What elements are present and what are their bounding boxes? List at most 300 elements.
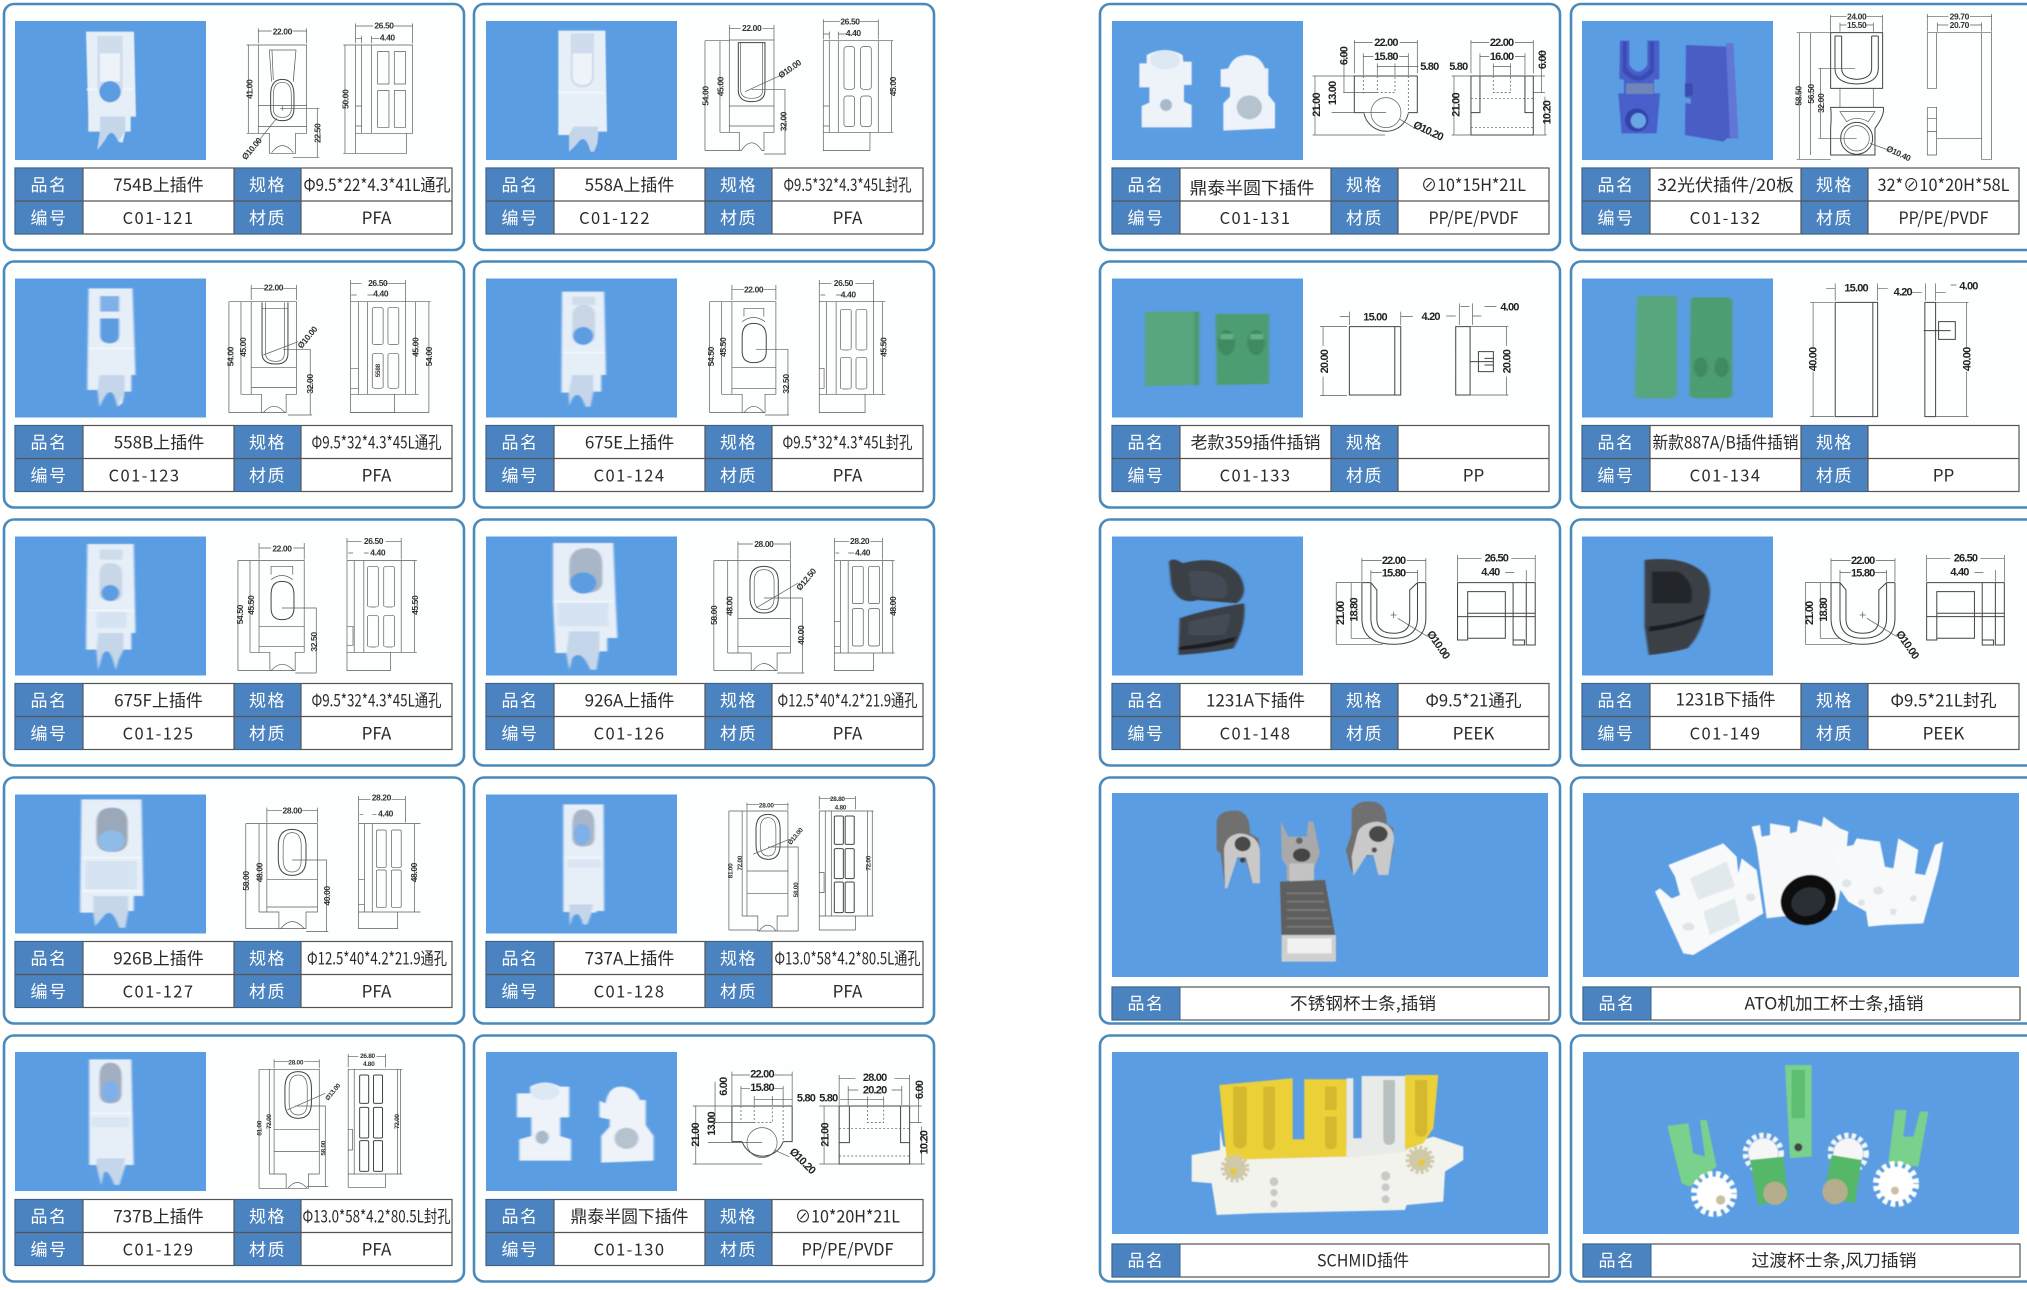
technical drawing: 558B: 45.00 bbox=[238, 337, 248, 357]
spec table: C01-132: C01-132 bbox=[1690, 205, 1761, 229]
panel: 32光伏插件/20板 C01-132 bbox=[1571, 4, 2027, 250]
technical drawing: 737A: 72.00 bbox=[865, 855, 872, 871]
technical drawing: 926B: 28.20 bbox=[372, 792, 392, 802]
spec table: C01-134: 规格 bbox=[1816, 428, 1853, 454]
product photo: 鼎泰 C01-130 bbox=[486, 1052, 677, 1191]
technical drawing: C01-134: 15.00 bbox=[1844, 283, 1869, 295]
technical drawing: C01-132: 32.00 bbox=[1816, 93, 1826, 113]
technical drawing: C01-130: 20.20 bbox=[863, 1084, 887, 1096]
panel: 1231B lower plug-in C01-149 bbox=[1571, 520, 2027, 766]
technical drawing: C01-131: 15.80 bbox=[1374, 51, 1398, 63]
spec table: SCHMID: SCHMID插件 bbox=[1317, 1246, 1409, 1272]
technical drawing: C01-134 bbox=[1808, 280, 1978, 417]
product photo: green transition parts bbox=[1583, 1052, 2019, 1234]
card frame bbox=[4, 778, 464, 1024]
card frame bbox=[1571, 262, 2027, 508]
technical drawing: 754B: 4.40 bbox=[380, 33, 395, 43]
technical drawing: 737B: 72.00 bbox=[394, 1114, 401, 1129]
panel: 675F upper plug-in bbox=[4, 520, 464, 766]
product photo: stainless steel parts bbox=[1112, 793, 1548, 977]
technical drawing: 558B: 54.00 bbox=[424, 346, 434, 366]
spec table: stainless bbox=[1112, 987, 1549, 1020]
spec table: C01-132: 32光伏插件/20板 bbox=[1657, 171, 1794, 196]
card frame bbox=[1571, 520, 2027, 766]
spec table: 675E: C01-124 bbox=[594, 462, 665, 486]
spec table: 558A: Φ9.5*32*4.3*45L封孔 bbox=[784, 171, 912, 196]
card frame bbox=[1100, 520, 1560, 766]
spec table: 675F bbox=[15, 684, 452, 750]
spec table: stainless: 不锈钢杯士条,插销 bbox=[1290, 990, 1436, 1014]
spec table: C01-132: 品名 bbox=[1598, 171, 1634, 196]
spec table: 558A: 材质 bbox=[720, 204, 757, 229]
technical drawing: C01-130: 5.80 bbox=[797, 1093, 816, 1105]
spec table: 737A: 品名 bbox=[502, 944, 538, 970]
spec table: 737A: 737A上插件 bbox=[585, 944, 674, 970]
technical drawing: 675E: 26.50 bbox=[834, 278, 854, 288]
technical drawing: C01-130: 21.00 bbox=[690, 1123, 702, 1147]
technical drawing: 675E bbox=[706, 278, 889, 415]
panel: 737B upper plug-in bbox=[4, 1036, 464, 1282]
technical drawing: C01-132: 24.00 bbox=[1847, 11, 1867, 21]
spec table: C01-149: 1231B下插件 bbox=[1676, 686, 1775, 710]
spec table: C01-133 bbox=[1112, 426, 1549, 492]
spec table: transition parts: 品名 bbox=[1598, 1246, 1636, 1272]
spec table: C01-148: C01-148 bbox=[1220, 720, 1291, 744]
spec table: C01-131 bbox=[1112, 168, 1549, 234]
technical drawing: 558B: 26.50 bbox=[368, 278, 388, 288]
product photo: 老款359 bbox=[1112, 278, 1303, 418]
technical drawing: C01-149: 21.00 bbox=[1804, 601, 1816, 625]
spec table: 926B: 品名 bbox=[30, 944, 68, 970]
spec table: C01-131: 规格 bbox=[1346, 171, 1383, 196]
spec table: 926A: 品名 bbox=[502, 686, 538, 712]
technical drawing: 675E: 45.50 bbox=[718, 337, 728, 357]
product photo: 新款887A/B bbox=[1582, 278, 1773, 418]
spec table: 558A: 品名 bbox=[502, 171, 538, 196]
technical drawing: 926B: 58.00 bbox=[241, 871, 251, 891]
technical drawing: 558B: 22.00 bbox=[264, 283, 284, 293]
product photo: SCHMID plug-in bbox=[1112, 1052, 1548, 1234]
spec table: 675F: Φ9.5*32*4.3*45L通孔 bbox=[312, 686, 442, 712]
product photo: 鼎泰 C01-131 bbox=[1112, 21, 1303, 160]
spec table: C01-148: 材质 bbox=[1346, 720, 1383, 744]
spec table: 926A: 926A上插件 bbox=[585, 686, 674, 712]
spec table: C01-130: ⊘10*20H*21L bbox=[795, 1202, 900, 1228]
spec table: 675F: PFA bbox=[362, 720, 392, 744]
technical drawing: C01-132: 56.50 bbox=[1806, 84, 1816, 104]
spec table: C01-132: 32*⊘10*20H*58L bbox=[1878, 171, 2010, 196]
spec table: 675F: 材质 bbox=[249, 720, 286, 744]
technical drawing: C01-131: 5.80 bbox=[1420, 61, 1439, 73]
technical drawing: 737B: 58.00 bbox=[320, 1140, 327, 1156]
spec table: 737B: 编号 bbox=[30, 1236, 68, 1260]
card frame bbox=[474, 778, 934, 1024]
spec table: 754B: 品名 bbox=[30, 171, 68, 196]
technical drawing: 675E: 54.50 bbox=[706, 346, 716, 366]
technical drawing: 754B: 41.00 bbox=[244, 79, 254, 99]
technical drawing: 737B: Ø13.00 bbox=[324, 1082, 343, 1102]
spec table: 737A: 规格 bbox=[720, 944, 757, 970]
technical drawing: C01-149: 22.00 bbox=[1851, 555, 1875, 567]
product photo: 737A bbox=[486, 794, 677, 934]
card frame bbox=[474, 1036, 934, 1282]
spec table: 754B: 材质 bbox=[249, 204, 286, 229]
spec table: C01-149: Φ9.5*21L封孔 bbox=[1890, 686, 1996, 712]
technical drawing: 675F: 4.40 bbox=[370, 547, 386, 557]
spec table: C01-131: 鼎泰半圆下插件 bbox=[1190, 174, 1314, 199]
spec table: C01-133: 材质 bbox=[1346, 462, 1383, 486]
product photo: 737B bbox=[15, 1052, 206, 1191]
spec table: 675E: 规格 bbox=[720, 428, 757, 454]
spec table: 558B bbox=[15, 426, 452, 492]
technical drawing: 926A: 58.00 bbox=[709, 605, 719, 625]
technical drawing: 675F: 26.50 bbox=[364, 536, 384, 546]
spec table: 675F: C01-125 bbox=[123, 720, 194, 744]
spec table: C01-149: 材质 bbox=[1816, 720, 1853, 744]
spec table: C01-134: C01-134 bbox=[1690, 462, 1761, 486]
spec table: C01-149: 编号 bbox=[1598, 720, 1634, 744]
spec table: C01-130: PP/PE/PVDF bbox=[802, 1236, 894, 1260]
technical drawing: C01-133: 20.00 bbox=[1319, 349, 1331, 373]
card frame bbox=[4, 1036, 464, 1282]
product photo: ATO machined parts bbox=[1583, 793, 2019, 977]
spec table: 558B: Φ9.5*32*4.3*45L通孔 bbox=[312, 428, 442, 454]
technical drawing: 558A bbox=[701, 16, 898, 154]
spec table: 675F: 品名 bbox=[30, 686, 68, 712]
panel: 558A upper plug-in bbox=[474, 4, 934, 250]
technical drawing: 926A bbox=[709, 536, 898, 673]
spec table: 926B: 规格 bbox=[249, 944, 286, 970]
spec table: 926A: C01-126 bbox=[594, 720, 665, 744]
spec table: 737B: C01-129 bbox=[123, 1236, 194, 1260]
technical drawing: C01-149: 18.80 bbox=[1818, 598, 1830, 622]
technical drawing: C01-149 bbox=[1804, 553, 2004, 662]
technical drawing: 558A: 45.00 bbox=[715, 76, 725, 96]
spec table: C01-134: 编号 bbox=[1598, 462, 1634, 486]
product photo: 558B bbox=[15, 278, 206, 418]
technical drawing: 1231A bbox=[1335, 553, 1535, 662]
spec table: 926B: PFA bbox=[362, 978, 392, 1002]
spec table: C01-130: 规格 bbox=[720, 1202, 757, 1228]
technical drawing: 1231A: 15.80 bbox=[1382, 568, 1406, 580]
technical drawing: 926A: 48.00 bbox=[888, 596, 898, 616]
spec table: C01-134: 品名 bbox=[1598, 428, 1634, 454]
spec table: 558A: 规格 bbox=[720, 171, 757, 196]
technical drawing: C01-132: 58.50 bbox=[1793, 86, 1803, 106]
spec table: 926B: 材质 bbox=[249, 978, 286, 1002]
technical drawing: C01-131: 6.00 bbox=[1339, 46, 1351, 65]
technical drawing: C01-149: 4.40 bbox=[1950, 567, 1969, 579]
technical drawing: 737A bbox=[728, 796, 873, 931]
card frame bbox=[474, 4, 934, 250]
panel: 1231A lower plug-in C01-148 bbox=[1100, 520, 1560, 766]
technical drawing: 1231A: 22.00 bbox=[1382, 555, 1406, 567]
technical drawing: 558A: 54.00 bbox=[701, 86, 711, 106]
spec table: 926A: PFA bbox=[833, 720, 863, 744]
spec table: C01-148: 1231A下插件 bbox=[1206, 686, 1305, 712]
technical drawing: 926B: 40.00 bbox=[322, 886, 332, 906]
spec table: 737A: 材质 bbox=[720, 978, 757, 1002]
technical drawing: 754B: 22.50 bbox=[313, 123, 323, 143]
spec table: 754B: PFA bbox=[362, 204, 392, 229]
technical drawing: 754B: 22.00 bbox=[273, 26, 293, 36]
technical drawing: C01-130: 21.00 bbox=[819, 1123, 831, 1147]
spec table: ATO: ATO机加工杯士条,插销 bbox=[1744, 990, 1924, 1014]
spec table: 558A: 编号 bbox=[502, 204, 538, 229]
technical drawing: 675E: 22.00 bbox=[744, 284, 764, 294]
technical drawing: C01-131 bbox=[1311, 37, 1554, 144]
spec table: 926A: 编号 bbox=[502, 720, 538, 744]
technical drawing: 558A: Ø10.00 bbox=[776, 57, 803, 80]
technical drawing: C01-130: 15.80 bbox=[750, 1082, 774, 1094]
technical drawing: 926A: 28.20 bbox=[850, 536, 870, 546]
spec table: C01-133: 编号 bbox=[1128, 462, 1164, 486]
spec table: 926A bbox=[486, 684, 923, 750]
product photo: 1231B bbox=[1582, 536, 1773, 676]
technical drawing: C01-131: 22.00 bbox=[1490, 37, 1514, 49]
spec table: 558B: 558B上插件 bbox=[114, 428, 204, 454]
technical drawing: 754B: Ø10.00 bbox=[240, 135, 264, 162]
panel: 926A upper plug-in bbox=[474, 520, 934, 766]
technical drawing: 675E: 45.50 bbox=[879, 337, 889, 357]
spec table: C01-132: 编号 bbox=[1598, 204, 1634, 229]
panel: 新款887A/B插件插销 C01-134 bbox=[1571, 262, 2027, 508]
card frame bbox=[1571, 778, 2027, 1024]
spec table: 737B: 737B上插件 bbox=[113, 1202, 204, 1228]
technical drawing: C01-130: 22.00 bbox=[750, 1069, 774, 1081]
technical drawing: C01-133 bbox=[1319, 302, 1519, 396]
technical drawing: C01-134: 40.00 bbox=[1808, 347, 1820, 371]
spec table: 558B: 规格 bbox=[249, 428, 286, 454]
spec table: C01-148: 编号 bbox=[1128, 720, 1164, 744]
spec table: C01-133: 老款359插件插销 bbox=[1190, 428, 1320, 454]
technical drawing: 737A: 58.00 bbox=[793, 882, 800, 897]
technical drawing: 926B: 4.40 bbox=[378, 809, 394, 819]
spec table: C01-132 bbox=[1582, 168, 2019, 234]
spec table: 558B: 编号 bbox=[30, 462, 68, 486]
spec table: 926B: 编号 bbox=[30, 978, 68, 1002]
technical drawing: C01-130: 6.00 bbox=[914, 1080, 926, 1099]
spec table: C01-130: C01-130 bbox=[594, 1236, 665, 1260]
panel: 737A upper plug-in bbox=[474, 778, 934, 1024]
spec table: C01-130: 品名 bbox=[502, 1202, 538, 1228]
technical drawing: 558A: 26.50 bbox=[840, 16, 860, 26]
product photo: 926B bbox=[15, 794, 206, 934]
spec table: 558B: PFA bbox=[362, 462, 392, 486]
card frame bbox=[4, 262, 464, 508]
spec table: C01-148: 规格 bbox=[1346, 686, 1383, 712]
spec table: C01-131: PP/PE/PVDF bbox=[1428, 204, 1518, 229]
spec table: 558A: PFA bbox=[833, 204, 863, 229]
spec table: 754B bbox=[15, 168, 452, 234]
panel: 754B upper plug-in bbox=[4, 4, 464, 250]
technical drawing: C01-130: Ø10.20 bbox=[787, 1146, 818, 1177]
spec table: C01-131: C01-131 bbox=[1220, 205, 1291, 229]
technical drawing: C01-133: 4.20 bbox=[1422, 311, 1440, 323]
spec table: 737B: Φ13.0*58*4.2*80.5L封孔 bbox=[302, 1202, 450, 1228]
technical drawing: 558A: 45.00 bbox=[888, 76, 898, 96]
technical drawing: 926A: Ø12.50 bbox=[794, 566, 819, 592]
technical drawing: 926B bbox=[241, 792, 420, 932]
spec table: 737A: 编号 bbox=[502, 978, 538, 1002]
spec table: C01-130: 材质 bbox=[720, 1236, 757, 1260]
spec table: 754B: Φ9.5*22*4.3*41L通孔 bbox=[304, 171, 450, 196]
spec table: 754B: 规格 bbox=[249, 171, 286, 196]
technical drawing: 737B bbox=[256, 1053, 402, 1188]
spec table: C01-130: 鼎泰半圆下插件 bbox=[570, 1202, 688, 1228]
spec table: C01-131: 材质 bbox=[1346, 204, 1383, 229]
card frame bbox=[474, 520, 934, 766]
card frame bbox=[1100, 1036, 1560, 1282]
spec table: 675E: 材质 bbox=[720, 462, 757, 486]
technical drawing: 558A: 22.00 bbox=[742, 23, 762, 33]
spec table: 926A: 规格 bbox=[720, 686, 757, 712]
technical drawing: C01-134: 40.00 bbox=[1961, 347, 1973, 371]
technical drawing: C01-131: 5.80 bbox=[1449, 61, 1468, 73]
spec table: 754B: C01-121 bbox=[123, 205, 194, 229]
technical drawing: C01-131: 21.00 bbox=[1450, 93, 1462, 117]
spec table: C01-148: PEEK bbox=[1453, 720, 1494, 744]
spec table: 754B: 754B上插件 bbox=[113, 171, 204, 196]
spec table: 737A: Φ13.0*58*4.2*80.5L通孔 bbox=[774, 944, 920, 970]
technical drawing: C01-133: 20.00 bbox=[1502, 349, 1514, 373]
product photo: 1231A bbox=[1112, 536, 1303, 676]
technical drawing: 926A: 4.40 bbox=[855, 547, 871, 557]
spec table: 675E: 编号 bbox=[502, 462, 538, 486]
technical drawing: 737B: 4.80 bbox=[363, 1061, 375, 1068]
spec table: 737B: PFA bbox=[362, 1236, 392, 1260]
spec table: C01-131: ⊘10*15H*21L bbox=[1421, 171, 1526, 196]
technical drawing: C01-132: Ø10.40 bbox=[1885, 143, 1913, 163]
panel: 鼎泰半圆下插件 C01-131 bbox=[1100, 4, 1560, 250]
spec table: 675F: 编号 bbox=[30, 720, 68, 744]
technical drawing: 926B: 48.00 bbox=[409, 862, 419, 882]
spec table: 558B: C01-123 bbox=[109, 462, 180, 486]
technical drawing: C01-130: 5.80 bbox=[819, 1093, 838, 1105]
panel: 675E upper plug-in bbox=[474, 262, 934, 508]
technical drawing: 675E: 32.50 bbox=[781, 374, 791, 394]
card frame bbox=[1100, 778, 1560, 1024]
spec table: 675E: 675E上插件 bbox=[585, 428, 674, 454]
technical drawing: C01-130: 28.00 bbox=[863, 1072, 887, 1084]
spec table: 675E bbox=[486, 426, 923, 492]
spec table: SCHMID: 品名 bbox=[1128, 1246, 1164, 1272]
panel: ATO机加工杯士条,插销 bbox=[1571, 778, 2027, 1024]
spec table: 558B: 材质 bbox=[249, 462, 286, 486]
panel: 不锈钢杯士条,插销 bbox=[1100, 778, 1560, 1024]
spec table: C01-132: 规格 bbox=[1816, 171, 1853, 196]
spec table: C01-133: 品名 bbox=[1128, 428, 1164, 454]
spec table: ATO bbox=[1583, 987, 2020, 1020]
card frame bbox=[1571, 1036, 2027, 1282]
spec table: C01-134: 新款887A/B插件插销 bbox=[1652, 428, 1798, 454]
technical drawing: 558B: 32.00 bbox=[305, 374, 315, 394]
technical drawing: 558B: 4.40 bbox=[373, 289, 389, 299]
technical drawing: C01-149: Ø10.00 bbox=[1893, 629, 1921, 662]
technical drawing: 675F: 32.50 bbox=[309, 632, 319, 652]
technical drawing: C01-132: 29.70 bbox=[1950, 11, 1970, 21]
panel: 558B upper plug-in bbox=[4, 262, 464, 508]
technical drawing: C01-134: 4.00 bbox=[1959, 280, 1978, 292]
spec table: 737A: C01-128 bbox=[594, 978, 665, 1002]
technical drawing: C01-131: 16.00 bbox=[1490, 51, 1514, 63]
technical drawing: C01-130 bbox=[690, 1069, 931, 1177]
spec table: 926B: C01-127 bbox=[123, 978, 194, 1002]
technical drawing: 737A: 4.80 bbox=[835, 804, 847, 811]
technical drawing: 558B bbox=[226, 278, 434, 415]
technical drawing: 754B: 26.50 bbox=[374, 21, 394, 31]
spec table: C01-131: 编号 bbox=[1128, 204, 1164, 229]
technical drawing: 675F: 45.50 bbox=[410, 595, 420, 615]
spec table: 558B: 品名 bbox=[30, 428, 68, 454]
technical drawing: 926A: 28.00 bbox=[754, 539, 774, 549]
technical drawing: 558B: 5588 bbox=[375, 363, 382, 377]
spec table: stainless: 品名 bbox=[1128, 990, 1164, 1014]
spec table: 737A bbox=[486, 942, 923, 1008]
spec table: ATO: 品名 bbox=[1598, 990, 1636, 1014]
technical drawing: 558B: 45.00 bbox=[411, 337, 421, 357]
card frame bbox=[1100, 4, 1560, 250]
spec table: C01-130: 编号 bbox=[502, 1236, 538, 1260]
spec table: C01-132: 材质 bbox=[1816, 204, 1853, 229]
technical drawing: C01-149: 15.80 bbox=[1851, 568, 1875, 580]
spec table: 558A bbox=[486, 168, 923, 234]
technical drawing: 737A: Ø13.00 bbox=[787, 826, 805, 846]
technical drawing: 737B: 81.00 bbox=[256, 1120, 263, 1136]
card frame bbox=[4, 520, 464, 766]
panel: 926B upper plug-in bbox=[4, 778, 464, 1024]
technical drawing: 558A: 4.40 bbox=[846, 28, 861, 38]
card frame bbox=[4, 4, 464, 250]
spec table: 675E: 品名 bbox=[502, 428, 538, 454]
panel: 鼎泰半圆下插件 C01-130 bbox=[474, 1036, 934, 1282]
technical drawing: 558B: Ø10.00 bbox=[295, 324, 320, 350]
spec table: 737A: PFA bbox=[833, 978, 863, 1002]
spec table: 737B: 品名 bbox=[30, 1202, 68, 1228]
spec table: 737B: 材质 bbox=[249, 1236, 286, 1260]
technical drawing: 1231A: Ø10.00 bbox=[1424, 629, 1452, 662]
technical drawing: 737B: 72.00 bbox=[266, 1114, 273, 1129]
technical drawing: 926A: 40.00 bbox=[796, 625, 806, 645]
spec table: C01-149 bbox=[1582, 684, 2019, 750]
card frame bbox=[1100, 262, 1560, 508]
spec table: 754B: 编号 bbox=[30, 204, 68, 229]
technical drawing: 737A: 81.00 bbox=[728, 863, 735, 878]
technical drawing: 926B: 28.00 bbox=[283, 805, 302, 815]
card frame bbox=[1571, 4, 2027, 250]
card frame bbox=[474, 262, 934, 508]
spec table: 926A: Φ12.5*40*4.2*21.9通孔 bbox=[778, 686, 918, 712]
technical drawing: 1231A: 18.80 bbox=[1349, 598, 1361, 622]
product photo: 558A bbox=[486, 21, 677, 160]
technical drawing: C01-131: Ø10.20 bbox=[1411, 119, 1445, 144]
technical drawing: C01-133: 4.00 bbox=[1500, 302, 1519, 314]
technical drawing: 1231A: 4.40 bbox=[1481, 567, 1500, 579]
spec table: C01-149: 规格 bbox=[1816, 686, 1853, 712]
spec table: 926B bbox=[15, 942, 452, 1008]
spec table: C01-130 bbox=[486, 1200, 923, 1266]
spec table: 737B: 规格 bbox=[249, 1202, 286, 1228]
technical drawing: 558A: 32.00 bbox=[779, 111, 789, 131]
spec table: 675E: PFA bbox=[833, 462, 863, 486]
technical drawing: 675E: 4.40 bbox=[841, 289, 856, 299]
spec table: 675F: 规格 bbox=[249, 686, 286, 712]
technical drawing: 675F: 54.50 bbox=[235, 604, 245, 624]
technical drawing: C01-130: 13.00 bbox=[706, 1112, 718, 1136]
technical drawing: 737A: 72.00 bbox=[737, 855, 744, 871]
technical drawing: 737A: 28.80 bbox=[830, 796, 845, 803]
technical drawing: C01-131: 10.20 bbox=[1542, 100, 1554, 124]
